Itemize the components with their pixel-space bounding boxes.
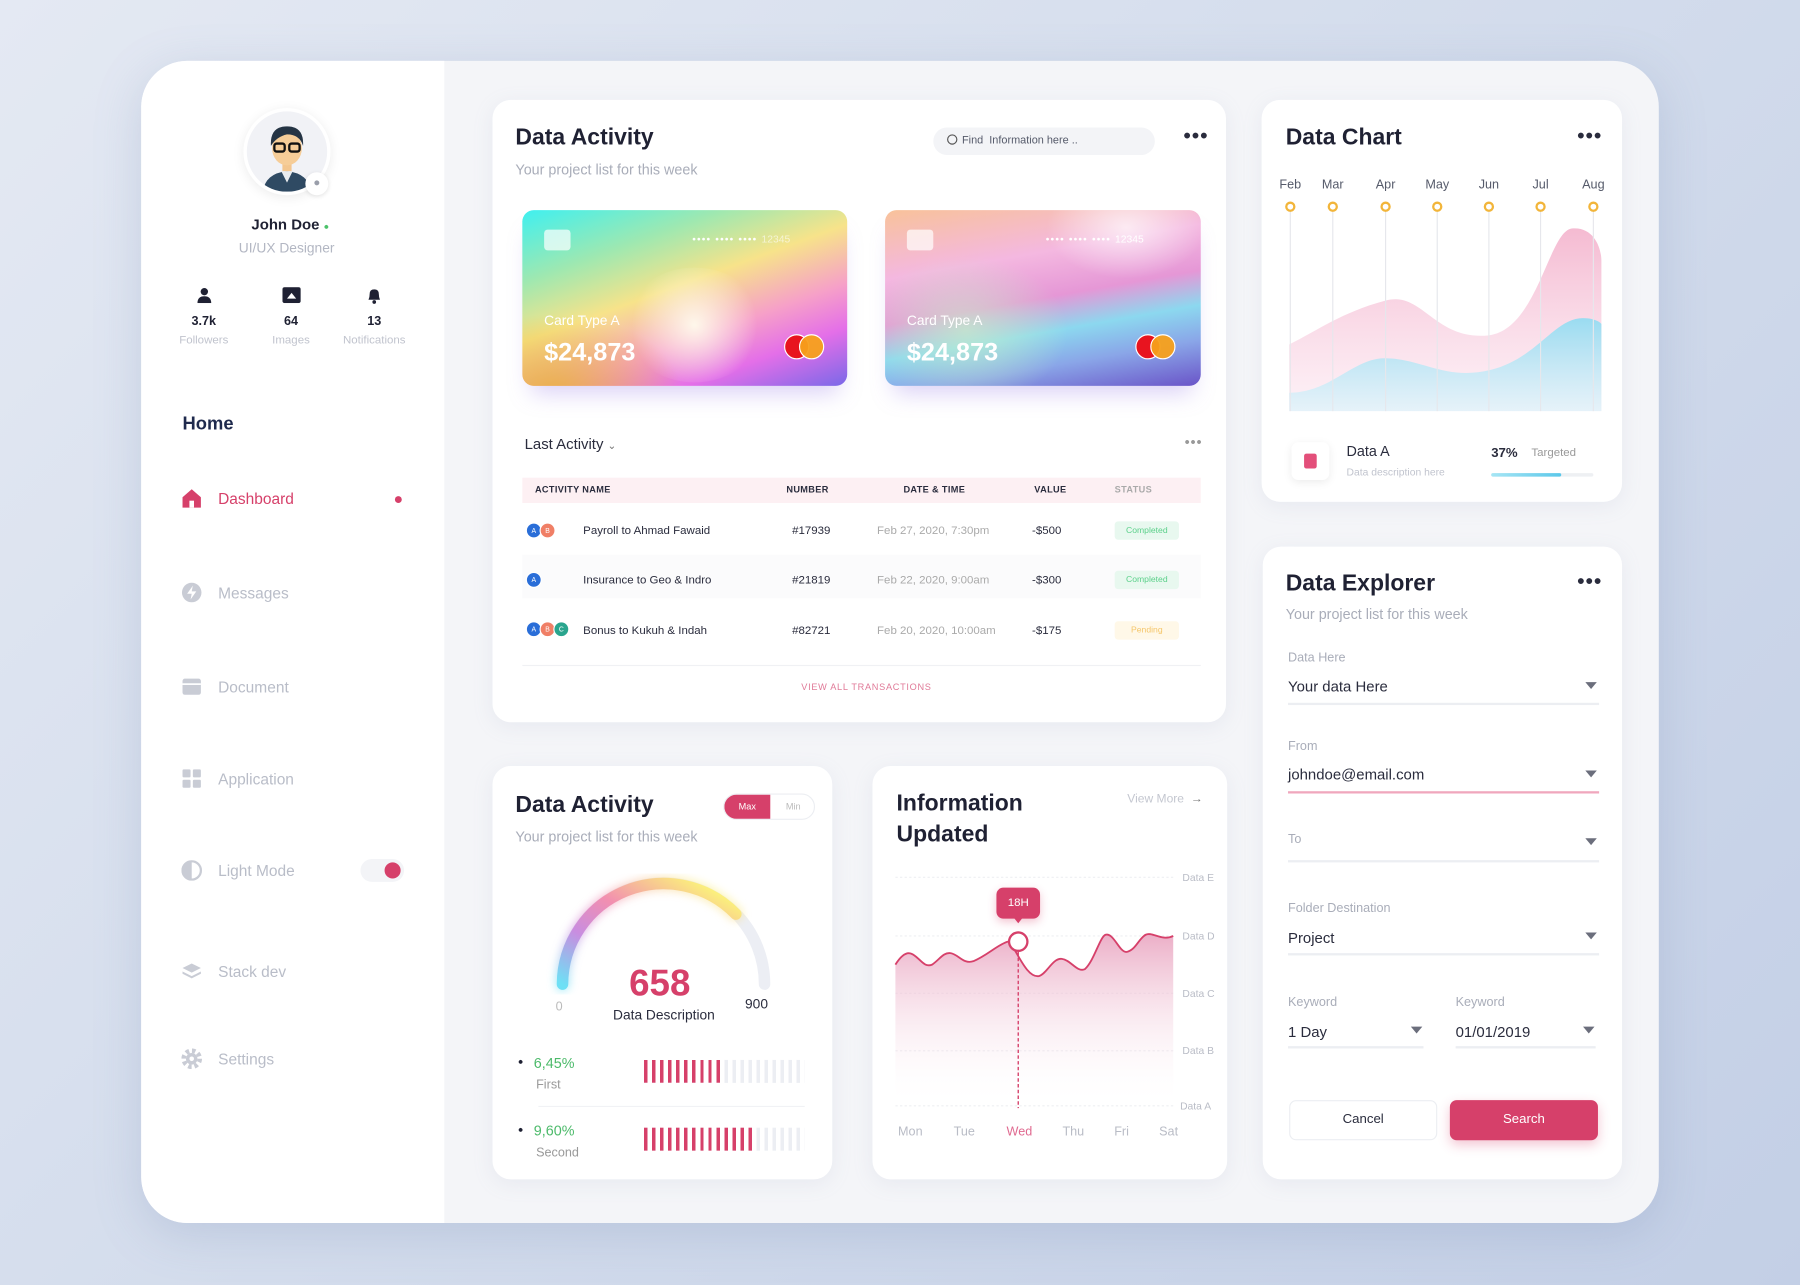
card 2: [885, 210, 1201, 386]
button search: Search: [1503, 1113, 1545, 1127]
panel: information updated: [872, 766, 1227, 1179]
subtitle: Your project list for this week: [515, 162, 698, 178]
search box: [933, 127, 1155, 155]
text: B: [545, 528, 550, 535]
text: ACTIVITY NAME: [535, 485, 611, 495]
stat row first: 6,45%: [534, 1055, 575, 1071]
line chart: Tue: [954, 1125, 975, 1139]
panel: data explorer: Your data Here: [1288, 678, 1388, 695]
stat images: Images: [272, 334, 310, 347]
text: Completed: [1126, 574, 1168, 585]
text: -$300: [1032, 574, 1061, 587]
text: Bonus to Kukuh & Indah: [583, 625, 707, 637]
field: data here: Data Here: [1288, 651, 1346, 665]
line chart: Sat: [1159, 1125, 1179, 1139]
title: Data Activity: [515, 125, 654, 150]
stat notifications: [343, 289, 405, 347]
max/min toggle: Max: [739, 802, 756, 812]
line chart: Data A: [1180, 1101, 1211, 1112]
card 1: [522, 210, 847, 386]
menu: dashboard: Dashboard: [218, 490, 294, 508]
text: VALUE: [1034, 485, 1066, 495]
menu: light mode: Light Mode: [218, 862, 295, 880]
panel: data explorer: [1263, 547, 1622, 1179]
stat row second: Second: [536, 1146, 579, 1160]
stat images: 64: [284, 315, 298, 328]
panel: data chart: 37%: [1491, 447, 1518, 460]
profile name: John Doe ●: [251, 216, 329, 233]
sidebar: [141, 61, 444, 1223]
legend icon: [1291, 442, 1329, 480]
menu: application: Application: [218, 771, 294, 788]
area chart: May: [1425, 177, 1450, 191]
panel: data activity gauge: 0: [556, 1000, 563, 1014]
text: B: [545, 627, 550, 634]
tooltip 18H: 18H: [1008, 897, 1029, 909]
line chart: Data D: [1182, 931, 1215, 942]
stat followers: 3.7k: [191, 315, 216, 328]
field: folder destination: Folder Destination: [1288, 901, 1391, 915]
text: Pending: [1131, 625, 1163, 635]
gauge value: 658: [629, 962, 690, 1004]
panel: data explorer: 1 Day: [1288, 1023, 1327, 1040]
max/min toggle: [723, 794, 815, 820]
panel: data chart: Data description here: [1347, 466, 1445, 478]
panel: data chart: Data A: [1347, 443, 1390, 459]
text: DATE & TIME: [903, 485, 965, 495]
line chart: Data B: [1182, 1046, 1214, 1057]
stat row first: First: [536, 1078, 561, 1092]
avatar badge: [305, 172, 328, 195]
dashboard frame: [141, 61, 1659, 1223]
panel: data explorer: Your project list for this week: [1286, 606, 1468, 622]
more dots: •••: [1184, 124, 1209, 147]
line chart: Data C: [1182, 989, 1215, 1000]
text: Feb 22, 2020, 9:00am: [877, 574, 989, 587]
panel: data explorer: 01/01/2019: [1456, 1023, 1530, 1040]
stat images: [272, 287, 310, 347]
menu: stack dev: Stack dev: [218, 963, 286, 981]
panel: data activity cards: [492, 100, 1226, 722]
card 1: Card Type A: [544, 312, 620, 328]
row 3: A: [531, 627, 536, 634]
text: -$175: [1032, 625, 1061, 637]
field: from: From: [1288, 740, 1317, 753]
profile role: UI/UX Designer: [239, 240, 334, 256]
mastercard logo: [784, 334, 809, 359]
text: A: [531, 578, 536, 585]
text: Payroll to Ahmad Fawaid: [583, 525, 710, 537]
text: -$500: [1032, 525, 1061, 537]
text: NUMBER: [786, 485, 829, 495]
menu: light mode: [182, 859, 404, 882]
text: Feb 27, 2020, 7:30pm: [877, 525, 989, 537]
line chart: [894, 873, 1215, 1139]
chip icon: [544, 230, 571, 250]
card 2: Card Type A: [907, 312, 982, 328]
panel: data explorer: Project: [1288, 929, 1334, 946]
panel: information updated: View More →: [1127, 792, 1203, 806]
gauge: [550, 874, 770, 994]
area chart: Feb: [1279, 177, 1301, 191]
panel: data activity gauge: Data Activity: [515, 792, 654, 818]
line chart: Mon: [898, 1125, 923, 1139]
panel: data explorer: •••: [1577, 570, 1602, 593]
panel: data activity gauge: 900: [745, 996, 768, 1012]
card 1: $24,873: [544, 338, 635, 366]
button cancel: Cancel: [1343, 1113, 1384, 1127]
stat notifications: 13: [367, 315, 381, 328]
stat row second: [518, 1123, 805, 1160]
card 1: •••• •••• •••• 12345: [692, 233, 790, 245]
stat row second: ●: [518, 1124, 523, 1135]
panel: data chart: Data Chart: [1286, 125, 1402, 150]
row 3: [526, 621, 542, 637]
menu: document: [182, 678, 289, 696]
button search: [1450, 1100, 1598, 1140]
panel: data activity gauge: [492, 766, 832, 1179]
table: transactions: [522, 478, 1200, 692]
stat notifications: Notifications: [343, 334, 405, 347]
panel: data chart: [1262, 100, 1622, 502]
avatar badge: ●: [313, 177, 320, 189]
panel: data chart: Targeted: [1531, 447, 1576, 459]
field: keyword 1: Keyword: [1288, 996, 1337, 1009]
search box: Find Information here ..: [962, 134, 1078, 147]
text: #21819: [792, 574, 830, 587]
line chart: Thu: [1062, 1125, 1084, 1139]
panel: data activity cards: •••: [1185, 434, 1203, 450]
area chart: Aug: [1582, 177, 1605, 191]
field: keyword 2: Keyword: [1456, 996, 1505, 1009]
stat row second: 9,60%: [534, 1123, 575, 1139]
card 2: $24,873: [907, 338, 998, 366]
text: STATUS: [1115, 485, 1152, 495]
panel: information updated: Information: [897, 791, 1023, 816]
area chart: Jun: [1479, 177, 1499, 191]
last activity heading: Last Activity ⌄: [525, 435, 616, 452]
panel: information updated: Updated: [897, 822, 988, 847]
text: Insurance to Geo & Indro: [583, 574, 711, 587]
stat row first: ●: [518, 1056, 523, 1067]
panel: data explorer: johndoe@email.com: [1288, 766, 1424, 783]
panel: data chart: •••: [1577, 124, 1602, 147]
panel: data activity gauge: Data Description: [613, 1007, 715, 1023]
table header: [522, 478, 1201, 503]
menu: messages: Messages: [218, 585, 289, 602]
max/min toggle: Min: [786, 802, 801, 812]
home heading: Home: [183, 415, 234, 434]
menu: document: Document: [218, 679, 289, 696]
menu: settings: Settings: [218, 1051, 274, 1068]
row 1: A: [531, 528, 536, 535]
menu: application: [182, 769, 294, 788]
text: C: [559, 627, 564, 634]
view all link: VIEW ALL TRANSACTIONS: [801, 682, 932, 692]
profile avatar: [243, 108, 331, 195]
chip icon: [907, 230, 933, 250]
menu: stack dev: [182, 963, 286, 981]
panel: data activity gauge: Your project list for this week: [515, 829, 698, 845]
line chart: Fri: [1114, 1125, 1129, 1139]
area chart: [1279, 177, 1605, 412]
line chart: Data E: [1182, 873, 1214, 884]
card 2: •••• •••• •••• 12345: [1046, 233, 1144, 245]
row 1: [526, 522, 542, 539]
stats: [179, 287, 405, 347]
panel: data explorer: Data Explorer: [1286, 571, 1435, 596]
area chart: Jul: [1533, 177, 1549, 191]
button cancel: [1289, 1100, 1437, 1140]
text: #82721: [792, 625, 830, 637]
area chart: Apr: [1376, 177, 1395, 191]
tooltip 18H: [996, 888, 1040, 919]
text: Feb 20, 2020, 10:00am: [877, 625, 996, 637]
menu: settings: [182, 1048, 274, 1069]
text: Completed: [1126, 525, 1168, 535]
stat followers: [179, 288, 228, 347]
menu: dashboard: [182, 489, 402, 508]
mastercard logo: [1135, 334, 1161, 359]
text: #17939: [792, 525, 830, 537]
stat followers: Followers: [179, 334, 228, 347]
menu: messages: [182, 582, 289, 602]
field: to: To: [1288, 833, 1301, 846]
row 2: [522, 555, 1201, 598]
area chart: Mar: [1322, 177, 1344, 191]
line chart: Wed: [1007, 1125, 1032, 1139]
stat row first: [518, 1055, 805, 1092]
